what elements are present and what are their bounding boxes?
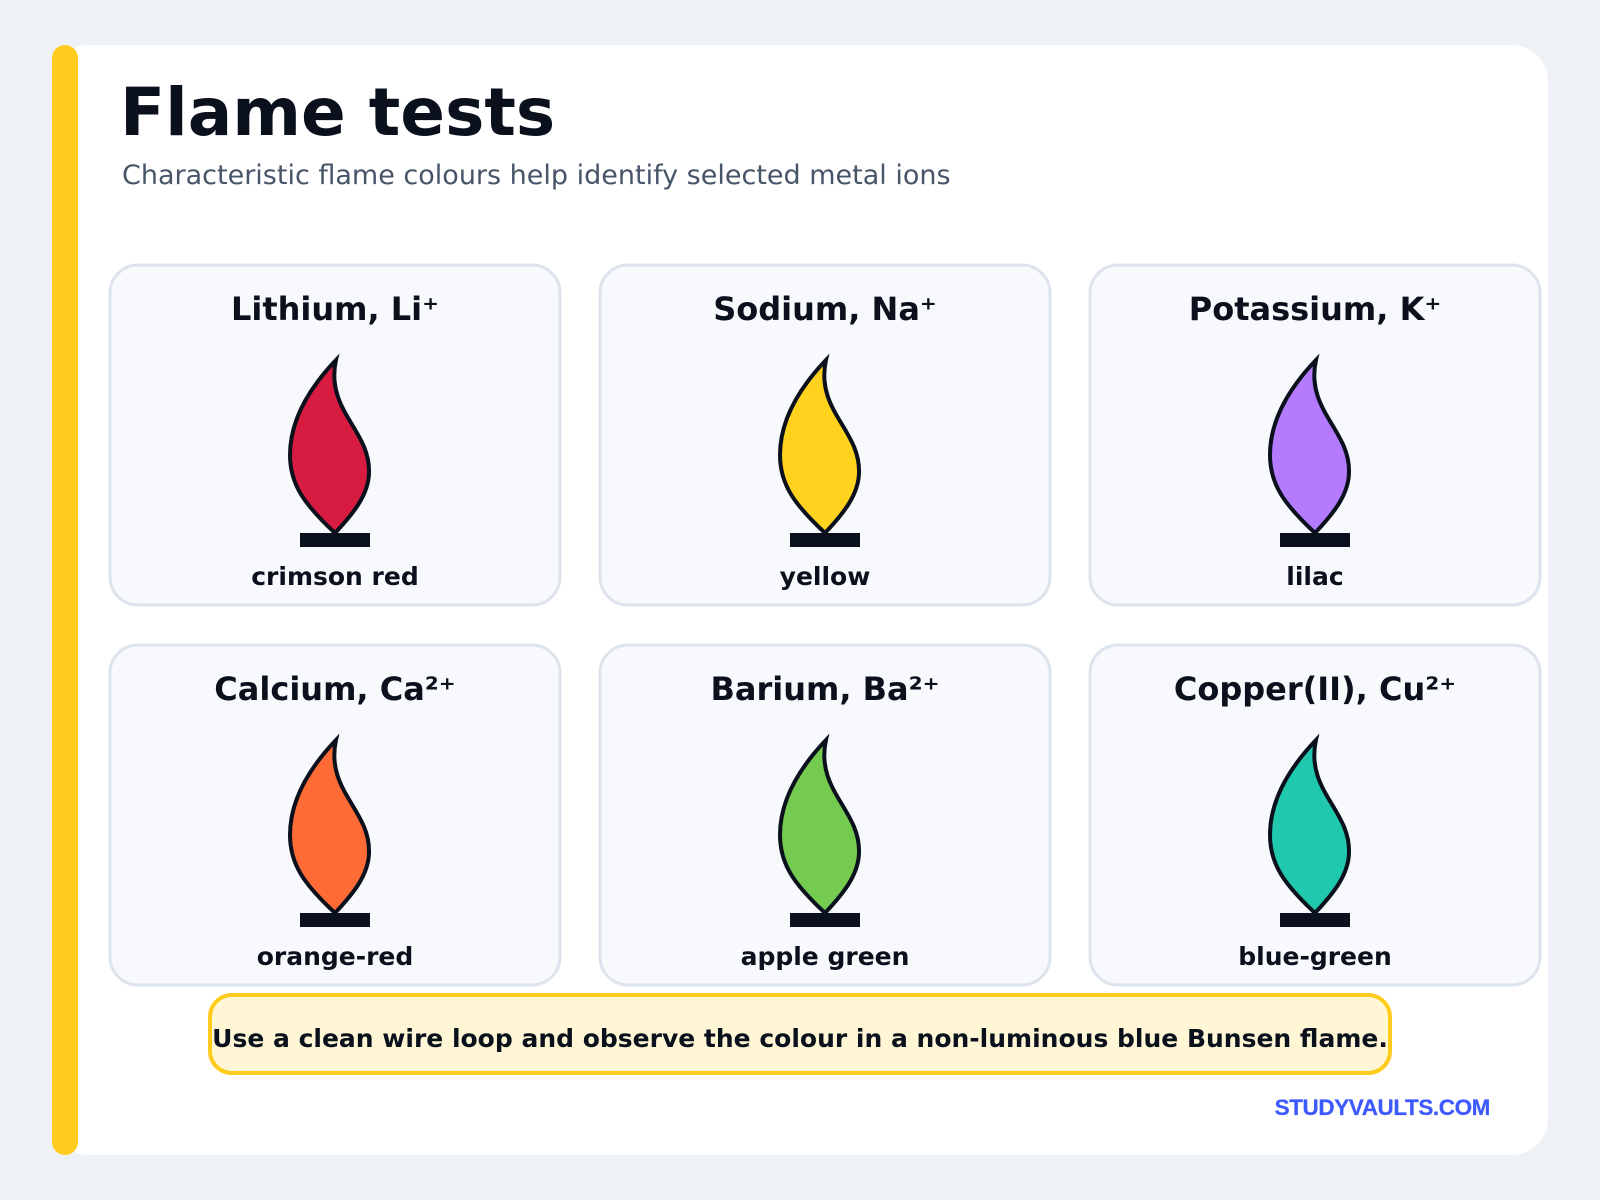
- lithium heading: Lithium, Li⁺: [231, 290, 439, 328]
- sodium heading: Sodium, Na⁺: [713, 290, 937, 328]
- copper heading: Copper(II), Cu²⁺: [1174, 670, 1456, 708]
- accent stripe: [52, 45, 78, 1155]
- icon: orange-red flame: [290, 740, 370, 927]
- sodium colour label: yellow: [780, 562, 870, 591]
- calcium colour label: orange-red: [257, 942, 413, 971]
- icon: apple green flame: [780, 740, 860, 927]
- title: Flame tests: [120, 74, 555, 151]
- panel: sodium: [600, 265, 1050, 605]
- callout: Use a clean wire loop and observe the colour in a non-luminous blue Bunsen flame.: [212, 1024, 1388, 1053]
- copper colour label: blue-green: [1238, 942, 1392, 971]
- brand footer: STUDYVAULTS.COM: [1275, 1095, 1490, 1120]
- callout: [210, 995, 1390, 1073]
- potassium colour label: lilac: [1286, 562, 1344, 591]
- potassium heading: Potassium, K⁺: [1189, 290, 1441, 328]
- barium heading: Barium, Ba²⁺: [710, 670, 940, 708]
- panel: potassium: [1090, 265, 1540, 605]
- panel: barium: [600, 645, 1050, 985]
- lithium colour label: crimson red: [251, 562, 419, 591]
- subtitle: Characteristic flame colours help identify selected metal ions: [122, 160, 951, 191]
- barium colour label: apple green: [741, 942, 909, 971]
- calcium heading: Calcium, Ca²⁺: [214, 670, 456, 708]
- panel: lithium: [110, 265, 560, 605]
- icon: yellow flame: [780, 360, 860, 547]
- panel: copper: [1090, 645, 1540, 985]
- icon: blue-green flame: [1270, 740, 1350, 927]
- icon: lilac flame: [1270, 360, 1350, 547]
- panel: calcium: [110, 645, 560, 985]
- icon: crimson flame: [290, 360, 370, 547]
